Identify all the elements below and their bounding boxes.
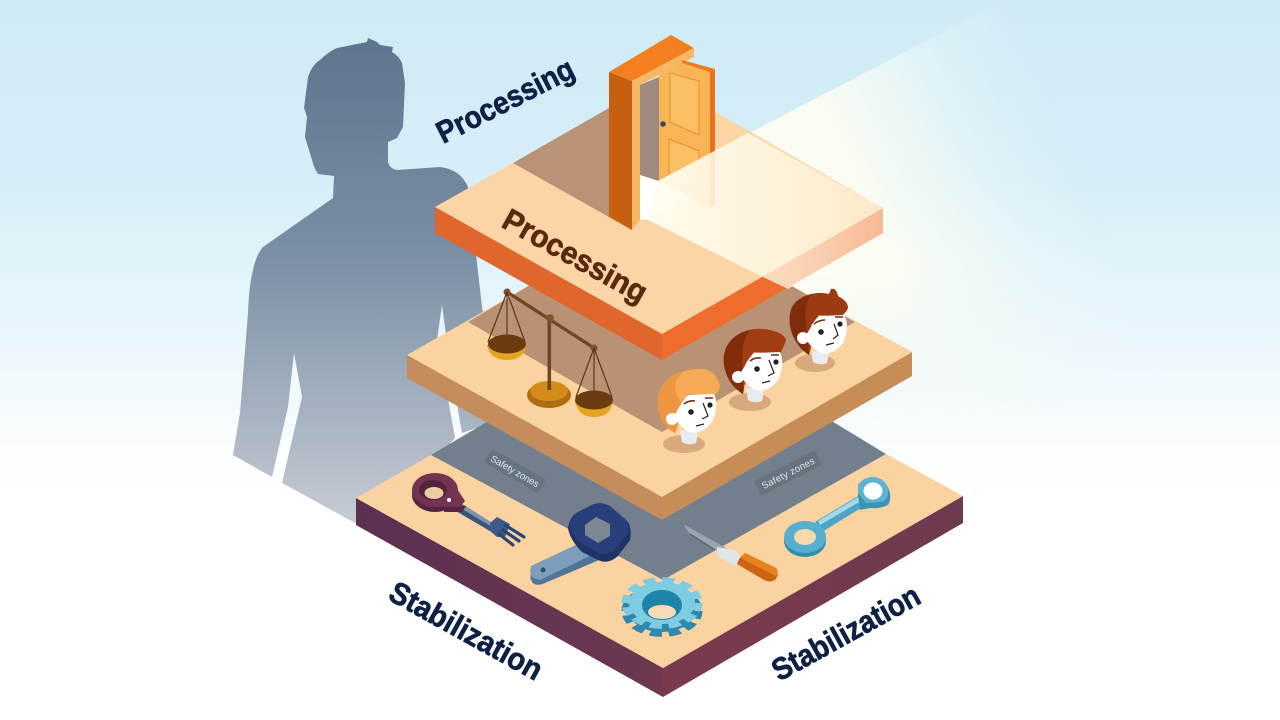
tag: right safety zones: Safety zones bbox=[760, 456, 817, 492]
top slab top face bbox=[435, 80, 883, 334]
door frame top bbox=[609, 35, 694, 81]
label: Processing on slab: Processing bbox=[497, 202, 654, 310]
icon: teal gear bbox=[626, 580, 698, 634]
tag: right safety zones bbox=[754, 450, 822, 496]
shadow under top slab bbox=[468, 285, 855, 432]
middle slab right side bbox=[662, 352, 912, 520]
platform: Processing (top layer) bbox=[435, 35, 883, 360]
label: Stabilization (right): Stabilization bbox=[766, 578, 926, 688]
icon: purple wrench bbox=[412, 473, 524, 545]
bottom slab right side bbox=[663, 496, 963, 697]
doorway lit floor bbox=[640, 175, 690, 220]
label: Stabilization (left): Stabilization bbox=[383, 574, 549, 687]
icon: person head, right bbox=[790, 289, 848, 372]
icon: person head, middle bbox=[724, 329, 786, 411]
platform: Stabilization (bottom layer) bbox=[356, 420, 963, 697]
icon: blue spanner bbox=[784, 477, 890, 557]
platform: middle layer bbox=[407, 285, 912, 520]
bottom slab left side bbox=[356, 498, 663, 697]
icon: balance scale bbox=[487, 288, 613, 417]
light beam over the slab bbox=[648, 133, 883, 289]
label: Processing (top): Processing bbox=[430, 51, 580, 150]
middle slab top face bbox=[407, 285, 912, 497]
doorway interior bbox=[640, 77, 659, 181]
light beam over the sky bbox=[751, 28, 1022, 350]
icon: utility knife bbox=[683, 524, 778, 582]
tag: left safety zones: Safety zones bbox=[488, 454, 541, 490]
door leaf bbox=[659, 63, 710, 208]
icon: blue key bbox=[530, 503, 631, 585]
bottom slab top face bbox=[356, 454, 963, 668]
door panels bbox=[670, 73, 699, 135]
silhouette of a person bbox=[233, 38, 500, 523]
grey safety zone bbox=[431, 420, 886, 580]
icon: open door bbox=[609, 35, 715, 230]
top slab left side bbox=[435, 207, 662, 360]
shadow behind door bbox=[513, 108, 609, 217]
tag: left safety zones bbox=[484, 449, 546, 493]
top slab right side bbox=[662, 208, 883, 360]
middle slab left side bbox=[407, 355, 662, 520]
icon: person head, left bbox=[658, 369, 720, 453]
door knob bbox=[660, 121, 666, 127]
door frame side bbox=[609, 72, 632, 230]
door frame front bbox=[632, 48, 694, 230]
